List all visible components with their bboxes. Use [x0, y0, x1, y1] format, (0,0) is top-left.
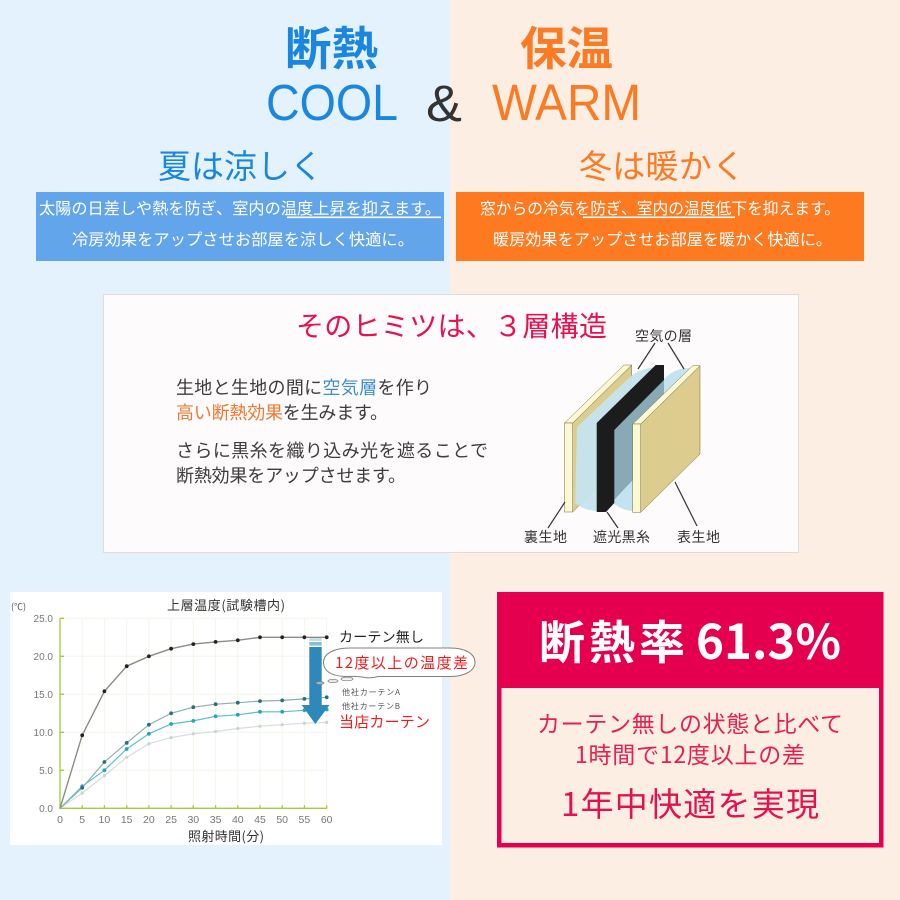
x axis labels: 25 — [165, 814, 177, 826]
callout: over 12 degree difference — [316, 648, 475, 685]
x axis labels: 40 — [232, 814, 244, 826]
blackout yarn — [597, 365, 664, 512]
x axis labels: 55 — [299, 814, 310, 826]
x axis labels: 10 — [99, 814, 110, 826]
series: curtain A — [60, 697, 327, 808]
diagram labels: 遮光黒糸 — [593, 527, 650, 547]
y axis labels: 25.0 — [34, 614, 53, 625]
series: no curtain — [60, 637, 327, 808]
body text: 高い断熱効果を生みます。 — [176, 399, 388, 425]
body text: 生地と生地の間に空気層を作り — [176, 374, 432, 400]
winter description box: 暖房効果をアップさせお部屋を暖かく快適に。 — [493, 226, 832, 250]
diagram labels: 表生地 — [677, 527, 720, 547]
panel: temperature line chart — [10, 592, 475, 845]
series: curtain B — [60, 710, 327, 808]
x axis labels — [57, 814, 333, 826]
front fabric — [633, 366, 700, 512]
x axis labels: 45 — [254, 814, 266, 826]
body text: 断熱効果をアップさせます。 — [176, 462, 406, 488]
comparison text — [537, 705, 843, 770]
y axis labels: 5.0 — [39, 766, 53, 777]
title: cool and warm: 断熱 — [285, 13, 378, 79]
diagram labels: 裏生地 — [524, 527, 567, 547]
y axis labels: 0.0 — [39, 804, 53, 815]
arrow: temperature drop — [302, 638, 330, 724]
x axis labels: 15 — [121, 814, 133, 826]
series: our curtain — [60, 722, 327, 808]
series label: curtain A: 他社カーテンA — [342, 687, 400, 698]
winter description box — [456, 192, 864, 261]
panel: summer — [36, 140, 444, 261]
summer description box: 冷房効果をアップさせお部屋を涼しく快適に。 — [72, 226, 414, 250]
leader lines — [548, 343, 697, 528]
summer description box — [36, 192, 444, 261]
y axis labels: 10.0 — [34, 728, 53, 739]
diagram labels — [524, 326, 720, 547]
series label: no curtain: カーテン無し — [339, 627, 424, 647]
series label: our curtain: 当店カーテン — [339, 711, 430, 732]
unit: (℃) — [11, 600, 26, 613]
body text: さらに黒糸を織り込み光を遮ることで — [176, 437, 488, 463]
axes — [60, 618, 327, 808]
diagram labels: 空気の層 — [635, 326, 692, 346]
x axis labels: 0 — [57, 814, 63, 826]
title: cool and warm: WARM — [492, 74, 641, 131]
back fabric — [564, 365, 632, 512]
summer description box: 太陽の日差しや熱を防ぎ、室内の温度上昇を抑えます。 — [39, 195, 441, 219]
title: cool and warm: 保温 — [520, 13, 613, 79]
x axis labels: 30 — [187, 814, 199, 826]
heading: three-layer structure: そのヒミツは、３層構造 — [296, 305, 607, 345]
air layers — [575, 367, 700, 511]
panel: winter — [456, 140, 864, 261]
grid — [60, 618, 327, 808]
x axis labels: 60 — [321, 814, 333, 826]
comparison text: 1時間で12度以上の差 — [575, 736, 805, 770]
translucent shadow — [614, 380, 664, 500]
conclusion text: 1年中快適を実現 — [561, 778, 819, 826]
x axis labels: 20 — [143, 814, 155, 826]
x axis title: 照射時間(分) — [188, 826, 264, 845]
y axis labels — [34, 614, 53, 815]
chart title: 上層温度(試験槽内) — [167, 595, 285, 614]
series label: curtain B: 他社カーテンB — [342, 701, 400, 712]
heading: summer: 夏は涼しく — [158, 140, 323, 188]
background: cool side — [0, 0, 450, 900]
title: cool and warm — [266, 13, 641, 132]
comparison text: カーテン無しの状態と比べて — [537, 705, 843, 739]
y axis labels: 15.0 — [34, 690, 53, 701]
heading: insulation rate 61.3%: 断熱率 — [539, 607, 685, 673]
heading: winter: 冬は暖かく — [579, 140, 745, 188]
x axis labels: 50 — [276, 814, 288, 826]
callout: over 12 degree difference: 12度以上の温度差 — [335, 652, 468, 673]
panel: insulation rate — [497, 592, 884, 848]
title: cool and warm: COOL — [266, 74, 398, 131]
y axis labels: 20.0 — [34, 652, 53, 663]
x axis labels: 5 — [79, 814, 85, 826]
winter description box: 窓からの冷気を防ぎ、室内の温度低下を抑えます。 — [480, 195, 840, 219]
x axis labels: 35 — [210, 814, 222, 826]
background: warm side — [450, 0, 900, 900]
heading: insulation rate 61.3% — [539, 603, 841, 673]
body text — [176, 374, 488, 488]
heading: insulation rate 61.3%: 61.3% — [696, 603, 841, 673]
panel: three-layer structure — [104, 294, 798, 552]
layer diagram — [524, 326, 720, 547]
title: cool and warm: & — [426, 75, 462, 132]
